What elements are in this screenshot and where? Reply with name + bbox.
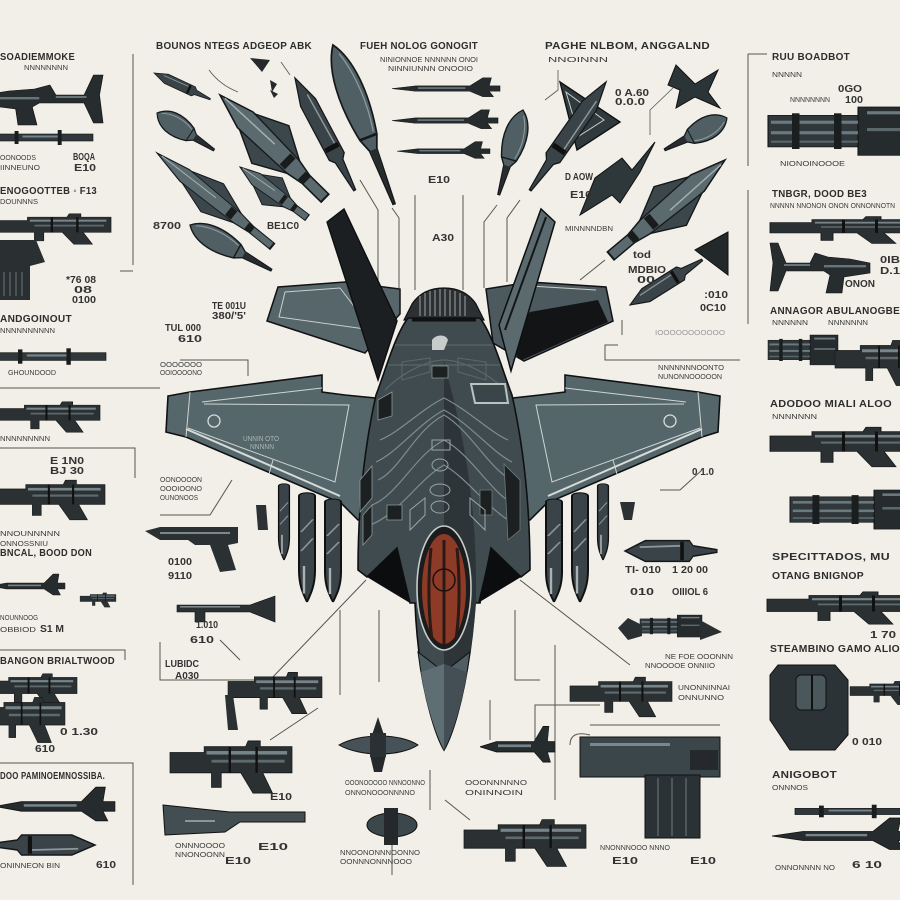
left wing: NNNNN xyxy=(250,444,274,451)
spec numbers: 380/'5' xyxy=(212,311,246,322)
small captions: NNNNN xyxy=(772,72,802,79)
small jet upper right xyxy=(668,65,720,108)
spec numbers: LUBIDC xyxy=(165,659,199,670)
spec numbers: E10 xyxy=(270,792,293,803)
small captions: NNNNNNNN xyxy=(790,97,830,104)
gatling xyxy=(768,107,900,155)
bell gun xyxy=(177,596,275,622)
headings: PAGHE NLBOM, ANGGALND xyxy=(545,41,710,52)
small captions: OOIOOOONO xyxy=(160,370,203,377)
spec numbers: D AOW xyxy=(565,172,593,183)
fish gun xyxy=(0,75,103,125)
gun behind pod xyxy=(850,681,900,705)
jet missile xyxy=(770,243,870,293)
spec numbers: E10 xyxy=(428,175,451,186)
pylon left xyxy=(256,505,268,530)
spec numbers: 1 20 00 xyxy=(672,565,708,576)
small captions: NNNNNNNN xyxy=(24,65,68,72)
spec numbers: 08 xyxy=(74,285,93,296)
spec numbers: A30 xyxy=(432,233,455,244)
small captions: ONINNEON BIN xyxy=(0,863,60,870)
spec numbers: BE1C0 xyxy=(267,221,299,232)
left horizontal stabilizer xyxy=(267,282,400,353)
right wing xyxy=(495,375,720,520)
small captions: NNONOONN xyxy=(175,852,225,859)
small captions: NNOONONNNOONNO xyxy=(340,850,421,857)
small captions: NNNNNNNOONTO xyxy=(658,365,725,372)
gun mid right xyxy=(770,427,900,467)
small captions: ONNONOOONNNNO xyxy=(345,790,416,797)
spec numbers: MDBIO xyxy=(628,265,666,276)
left column weapons xyxy=(0,75,116,855)
side vents left xyxy=(360,392,402,545)
headings: STEAMBINO GAMO ALIO xyxy=(770,644,900,655)
spec numbers: 0GO xyxy=(838,84,862,95)
fish nose xyxy=(618,618,722,640)
intake left xyxy=(367,548,410,603)
pod xyxy=(770,665,848,750)
spec numbers: 1.010 xyxy=(196,620,218,631)
spec numbers: 6 10 xyxy=(852,860,883,871)
small captions: OONNNONNNOOO xyxy=(340,859,413,866)
tube xyxy=(0,130,93,145)
spec numbers: 0100 xyxy=(72,295,96,306)
right horizontal stabilizer xyxy=(486,282,613,361)
rifle 6 xyxy=(0,787,115,821)
small captions: OOOIOONO xyxy=(160,486,203,493)
headings: ANIGOBOT xyxy=(772,770,837,781)
small captions: NNNNNNNNNN xyxy=(0,328,55,335)
small captions: ONNUNNO xyxy=(678,695,725,702)
left vertical tail xyxy=(327,209,397,380)
small captions: NNNNNN xyxy=(772,320,808,327)
spec numbers: 0IB xyxy=(880,255,900,266)
left wing: UNNIN OTO xyxy=(243,436,280,443)
small captions: OOOOOOO xyxy=(160,362,203,369)
magazine launcher xyxy=(0,240,45,300)
headings: BOUNOS NTEGS ADGEOP ABK xyxy=(156,41,312,52)
fuselage emblem xyxy=(471,384,508,403)
small captions: UNONNINNAI xyxy=(678,685,730,692)
assault rifle centre xyxy=(228,672,322,714)
spec numbers: 010 xyxy=(630,587,655,598)
headings: ENOGOOTTEB ◦ F13 xyxy=(0,186,97,197)
vertical ogive xyxy=(488,107,534,198)
recoilless tube xyxy=(163,805,305,835)
turret gun xyxy=(640,615,702,637)
small captions: NNNNNNN xyxy=(772,414,817,421)
small captions: ONNNOS xyxy=(772,785,808,792)
spec numbers: 1 70 xyxy=(870,630,897,641)
spec numbers: 610 xyxy=(178,334,203,345)
intake right xyxy=(478,548,521,603)
spec numbers: 0 1.0 xyxy=(692,467,714,478)
headings: FUEH NOLOG GONOGIT xyxy=(360,41,478,52)
spec numbers: 8700 xyxy=(153,221,182,232)
rocket tube xyxy=(0,348,106,365)
heavy gun xyxy=(768,335,900,386)
gun upper right xyxy=(770,216,900,244)
small captions: NNOOOOE ONNIIO xyxy=(645,663,716,670)
small captions: OONOODS xyxy=(0,155,36,162)
magazine xyxy=(225,695,238,730)
bottom weapons xyxy=(145,502,722,866)
small captions: MINNNNDBN xyxy=(565,226,613,233)
small captions: NINNIUNNN ONOOIO xyxy=(388,66,474,73)
spec numbers: BJ 30 xyxy=(50,466,85,477)
right column weapons xyxy=(767,107,900,850)
callout leader lines xyxy=(0,54,767,885)
large missile xyxy=(201,76,343,217)
dark jet xyxy=(580,142,655,215)
spec numbers: 0100 xyxy=(168,557,192,568)
headings: TNBGR, DOOD BE3 xyxy=(772,189,867,200)
small captions: NIONOINOOOE xyxy=(780,161,845,168)
horizontal missile 3 xyxy=(397,142,490,158)
spec numbers: tod xyxy=(633,250,651,261)
spec numbers: 0 1.30 xyxy=(60,727,99,738)
short missile xyxy=(480,726,555,762)
small captions: NINIONNOE NNNNNN ONOI xyxy=(380,57,478,64)
small captions: NNONNNOOO NNNO xyxy=(600,845,671,852)
missile lower right xyxy=(772,818,900,850)
small captions: IOOOOOOOOOOO xyxy=(655,330,726,337)
missile 2 xyxy=(146,139,283,260)
rifle 4 xyxy=(0,480,105,520)
missile 3 xyxy=(230,154,317,231)
top centre weapons xyxy=(146,40,741,311)
jet fighter xyxy=(166,209,720,750)
small pistol xyxy=(80,593,116,607)
ogive 2 xyxy=(184,215,277,280)
spec numbers: TI- 010 xyxy=(625,565,661,576)
left wing xyxy=(166,375,395,520)
headings: ANNAGOR ABULANOGBE xyxy=(770,306,900,317)
spec numbers: 0C10 xyxy=(700,303,726,314)
spec numbers: 0 010 xyxy=(852,737,883,748)
spec numbers: E10 xyxy=(570,190,593,201)
spec numbers: E10 xyxy=(74,163,97,174)
spec numbers: 9110 xyxy=(168,571,192,582)
headings: SOADIEMMOKE xyxy=(0,52,75,63)
rifle bottom left xyxy=(170,741,292,793)
headings: ANDGOINOUT xyxy=(0,314,72,325)
headings: OTANG BNIGNOP xyxy=(772,571,864,582)
fin fragment xyxy=(250,58,278,98)
spec numbers: *76 08 xyxy=(66,275,96,286)
spec numbers: :010 xyxy=(704,290,729,301)
small captions: NNNNN NNONON ONON ONNONNOTN xyxy=(770,203,895,210)
small captions: NE FOE OOONNN xyxy=(665,654,733,661)
small captions: ONNONNNN NO xyxy=(775,865,836,872)
headings: BANGON BRIALTWOOD xyxy=(0,656,115,667)
big gun xyxy=(580,737,720,838)
spec numbers: 100 xyxy=(845,95,863,106)
spec numbers: 610 xyxy=(35,744,56,755)
gun lower right xyxy=(790,490,900,529)
centre panel details xyxy=(410,440,485,530)
thin missile xyxy=(288,74,362,194)
spec numbers: E 1N0 xyxy=(50,456,85,467)
rifle lower centre xyxy=(570,677,672,717)
side vents right xyxy=(480,464,520,540)
spec numbers: BOQA xyxy=(73,152,95,163)
spec numbers: TE 001U xyxy=(212,301,246,312)
spec numbers: E10 xyxy=(258,842,289,853)
small captions: IINNEUNO xyxy=(0,165,41,172)
spec numbers: 0 A.60 xyxy=(615,88,650,99)
small captions: GHOUNDOOD xyxy=(8,370,56,377)
spec numbers: E10 xyxy=(690,856,717,867)
tall rocket xyxy=(320,40,406,209)
assault gun right xyxy=(767,592,900,624)
rifle 3 xyxy=(0,402,100,432)
assault rifle 2 xyxy=(0,698,65,742)
small jet upper left xyxy=(152,69,212,104)
horizontal missile 1 xyxy=(392,78,500,97)
rifle lower right xyxy=(795,805,900,818)
spec numbers: 0.0.0 xyxy=(615,97,646,108)
spec numbers: A030 xyxy=(175,671,199,682)
winged bomb xyxy=(339,717,418,772)
small captions: NNOINNN xyxy=(548,57,608,64)
small captions: DOUNNNS xyxy=(0,199,38,206)
bottom gun xyxy=(464,820,586,866)
headings: RUU BOADBOT xyxy=(772,52,850,63)
small captions: OUNONOOS xyxy=(160,495,198,502)
rifle 5 xyxy=(0,574,65,595)
spec numbers: TUL 000 xyxy=(165,323,201,334)
bottom missile xyxy=(0,835,95,855)
spec numbers: S1 M xyxy=(40,624,64,635)
underwing missiles xyxy=(279,484,608,602)
spec numbers: OIIIOL 6 xyxy=(672,587,708,598)
fuselage xyxy=(358,318,530,750)
headings: SPECITTADOS, MU xyxy=(772,552,890,563)
spec numbers: 00 xyxy=(637,275,656,286)
spec numbers: D.1 xyxy=(880,266,900,277)
assault rifle xyxy=(0,674,77,706)
pistol xyxy=(145,527,238,572)
headings: ADODOO MIALI ALOO xyxy=(770,399,892,410)
small captions: ONNOSSNIU xyxy=(0,541,48,548)
rifle 2 xyxy=(0,214,111,244)
engine nozzle xyxy=(404,288,484,320)
small captions: NNNNNNN xyxy=(828,320,868,327)
small captions: ONNNOOOO xyxy=(175,843,226,850)
canopy xyxy=(417,526,471,650)
rocket right xyxy=(625,541,717,561)
round pod xyxy=(367,808,417,845)
ogive right xyxy=(659,108,732,160)
triangle fin missile xyxy=(523,77,620,195)
spec numbers: E10 xyxy=(225,856,252,867)
small captions: OOONOOOOO NNNOONNO xyxy=(345,780,425,787)
small captions: OONOOOON xyxy=(160,477,202,484)
small captions: NNNNNNNNN xyxy=(0,436,50,443)
small captions: OBBIOD xyxy=(0,627,36,634)
pylon right xyxy=(620,502,635,520)
large right missile xyxy=(595,141,741,275)
spec numbers: 610 xyxy=(96,860,117,871)
horizontal missile 2 xyxy=(392,110,498,129)
spec numbers: E10 xyxy=(612,856,639,867)
small captions: NUNONNOOOOON xyxy=(658,374,722,381)
small captions: OOONNNNNO xyxy=(465,780,528,787)
small captions: ONINNOIN xyxy=(465,790,523,797)
nose cone xyxy=(418,652,470,750)
fish missile right xyxy=(626,232,728,311)
spec numbers: 610 xyxy=(190,635,215,646)
small captions: NOUNNOOG xyxy=(0,615,38,622)
spec numbers: ONON xyxy=(845,279,875,290)
ogive 1 xyxy=(151,104,220,159)
headings: BNCAL, BOOD DON xyxy=(0,548,92,559)
right vertical tail xyxy=(499,209,555,371)
small captions: NNOUNNNNN xyxy=(0,531,60,538)
headings: DOO PAMINOEMNOSSIBA. xyxy=(0,771,105,782)
